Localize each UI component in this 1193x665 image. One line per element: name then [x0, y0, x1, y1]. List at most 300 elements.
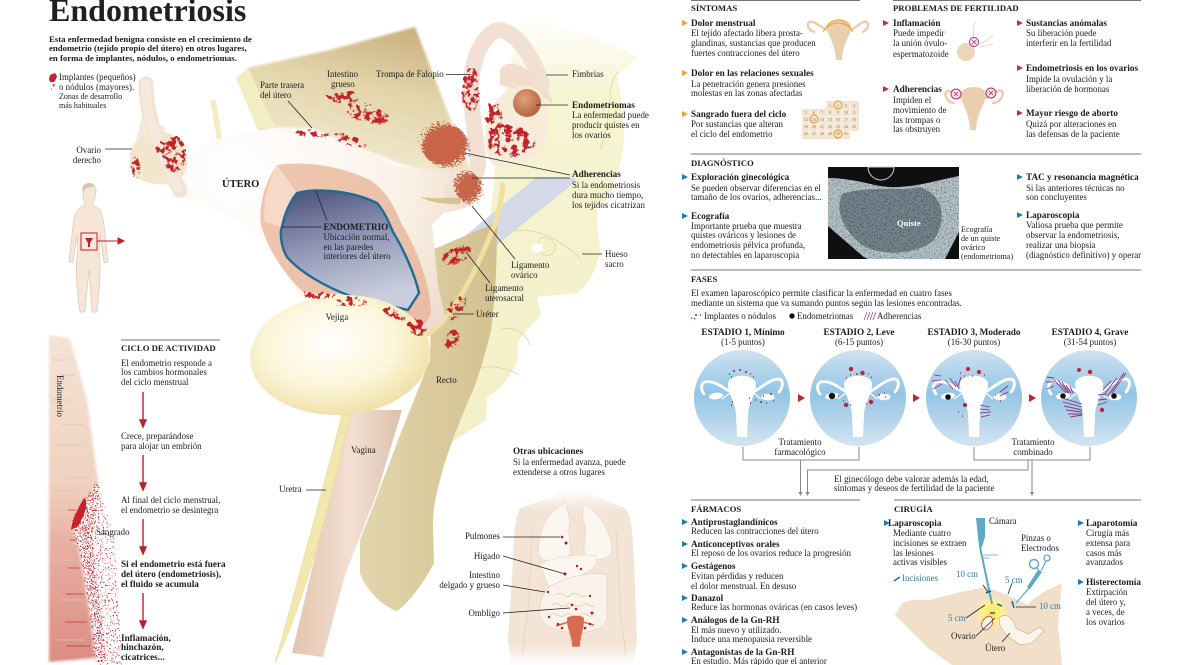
caption: Ecografía — [961, 225, 993, 234]
text step 5: cicatrices... — [121, 652, 165, 662]
item: adherencias — [883, 84, 947, 134]
stage 1: (1-5 puntos) — [721, 337, 765, 347]
item: laparoscopia — [884, 518, 967, 567]
legend: incisiones: Incisiones — [902, 573, 939, 583]
item: histerectomía: Extirpación — [1086, 587, 1128, 597]
label: pulmones — [465, 531, 560, 541]
right ovary — [485, 86, 548, 168]
label: adherencias: dura mucho tiempo, — [572, 190, 643, 200]
icon: calendar: 17 — [844, 117, 848, 122]
item: aborto: las defensas de la paciente — [1026, 129, 1120, 139]
intestines — [540, 574, 607, 633]
label: intestino grueso: grueso — [331, 79, 355, 89]
label: tratamiento farmacológico — [774, 437, 826, 457]
item: sangrado: Por sustancias que alteran — [691, 119, 783, 129]
description: El examen laparoscópico permite clasificar la enfermedad en cuatro fases — [691, 288, 952, 298]
item: tac: TAC y resonancia magnética — [1026, 172, 1139, 182]
implants — [547, 536, 594, 629]
item: histerectomía: a veces, de — [1086, 607, 1125, 617]
icon: calendar: 3 — [845, 103, 847, 108]
item: Análogos de la Gn-RH — [691, 615, 780, 625]
label: trompa: Trompa de Falopio — [376, 69, 444, 79]
label: útero: ÚTERO — [222, 178, 259, 190]
stage 3: ESTADIO 3, Moderado — [928, 327, 1021, 337]
left fimbria — [135, 100, 178, 170]
intro text: en forma de implantes, nódulos, o endometriomas. — [49, 53, 237, 63]
item: endometriosis ovarios: liberación de hormonas — [1026, 84, 1110, 94]
rectum — [360, 222, 497, 611]
label: endometriomas: Endometriomas — [572, 100, 635, 110]
peritoneum pale band — [210, 68, 275, 152]
text step 1: los cambios hormonales — [121, 367, 207, 377]
item: inflamación: Inflamación — [893, 18, 940, 28]
arrow — [140, 593, 146, 628]
torso — [508, 490, 637, 665]
item: dolor menstrual — [682, 18, 816, 58]
intro text — [49, 34, 252, 63]
item: inflamación: Puede impedir — [893, 28, 945, 38]
label: adherencias: Si la endometriosis — [572, 180, 641, 190]
intro text: endometrio (tejido propio del útero) en otros lugares, — [49, 43, 247, 53]
legend: Implantes o nódulos — [704, 311, 777, 321]
label: uretra: Uretra — [279, 484, 302, 494]
text step 3: Al final del ciclo menstrual, — [121, 495, 220, 505]
label: ligamento ovárico: ovárico — [511, 270, 538, 280]
caption: (endometrioma) — [961, 252, 1013, 261]
item: ecografía: endometriosis pélvica profunda, — [691, 240, 805, 250]
item: laparotomía: Laparotomía — [1086, 518, 1138, 528]
left tube — [146, 84, 180, 190]
item — [682, 517, 819, 536]
text step 4: del útero (endometriosis), — [121, 569, 221, 579]
endometrium strip — [49, 335, 122, 665]
item: Antagonistas de la Gn-RH — [691, 647, 794, 657]
label: recto: Recto — [436, 375, 457, 385]
icon: calendar: 31 — [844, 131, 848, 136]
item: laparoscopia: Valiosa prueba que permite — [1026, 220, 1123, 230]
label: ligamento ovárico: Ligamento — [511, 260, 550, 270]
item: adherencias: las obstruyen — [893, 124, 941, 134]
item: exploración — [682, 172, 822, 202]
uterus — [556, 616, 594, 646]
item: laparoscopia: incisiones se extraen — [893, 538, 967, 548]
legend: implants — [49, 72, 136, 110]
label: cámara: Cámara — [989, 516, 1017, 526]
divider heading — [121, 339, 220, 341]
left ovary — [130, 132, 187, 184]
item: ecografía: Ecografía — [691, 211, 730, 221]
uterine cavity — [281, 190, 419, 310]
item — [682, 539, 852, 558]
text step 4 — [121, 559, 226, 589]
icon: calendar: 25 — [852, 124, 856, 129]
label: parte trasera — [260, 80, 312, 128]
item: Danazol — [691, 593, 724, 603]
icon: calendar: 13 — [812, 117, 816, 122]
label: ovario: Ovario — [951, 631, 976, 641]
label: endometrio: ENDOMETRIO — [324, 222, 388, 232]
uterus cross-section wall — [260, 163, 431, 335]
legend — [691, 311, 922, 321]
icon: calendar: 9 — [837, 110, 839, 115]
intro text: Esta enfermedad benigna consiste en el crecimiento de — [49, 34, 252, 44]
arrow — [140, 392, 146, 427]
panel: cirugía — [884, 500, 1141, 665]
item: El más nuevo y utilizado. — [691, 625, 781, 635]
icon: calendar: 23 — [836, 124, 840, 129]
heading — [513, 446, 626, 477]
label: fimbrias: Fimbrias — [572, 69, 604, 79]
endometrioma cyst — [513, 89, 541, 117]
measure: 10 cm: 10 cm — [1039, 601, 1061, 611]
label: hueso sacro: Hueso — [605, 249, 628, 259]
text step 2: para alojar un embrión — [121, 441, 202, 451]
icon: calendar: 11 — [852, 110, 856, 115]
label: pinzas — [1021, 533, 1059, 553]
item: dolor menstrual: Dolor menstrual — [691, 18, 756, 28]
description: mediante un sistema que va sumando puntos según las lesiones encontradas. — [691, 298, 962, 308]
incision marks — [986, 591, 1014, 613]
item — [682, 593, 857, 612]
label: tratamiento combinado: Tratamiento — [1011, 437, 1055, 447]
label: uréter — [453, 309, 499, 319]
item: dolor relaciones: La penetración genera presiones — [691, 79, 806, 89]
description — [691, 288, 962, 308]
item: laparoscopia — [1017, 210, 1141, 260]
treatment brackets and arrows — [743, 447, 1090, 496]
label: endometriomas: La enfermedad puede — [572, 110, 649, 120]
label: ligamento uterosacral: Ligamento — [485, 283, 524, 293]
item: sangrado: Sangrado fuera del ciclo — [691, 109, 787, 119]
panel: síntomas — [682, 0, 868, 139]
icon: calendar: 22 — [828, 124, 832, 129]
item: el dolor menstrual. En desuso — [691, 581, 797, 591]
measure: 5 cm: 5 cm — [948, 613, 966, 623]
heading: PROBLEMAS DE FERTILIDAD — [893, 3, 1019, 13]
item: aborto — [1017, 108, 1120, 139]
item: laparotomía — [1078, 518, 1138, 567]
illustration: pelvic anatomy — [130, 15, 649, 663]
icon: calendar — [802, 101, 859, 139]
label: endometrio — [282, 191, 391, 261]
item: sangrado: el ciclo del endometrio — [691, 129, 773, 139]
icon: calendar: 6 — [813, 110, 815, 115]
item: ecografía: Importante prueba que muestra — [691, 221, 802, 231]
item: sustancias: interferir en la fertilidad — [1026, 38, 1112, 48]
icon: calendar: 16 — [836, 117, 840, 122]
icon: calendar: 15 — [828, 117, 832, 122]
small figure with location marker — [69, 183, 124, 312]
item: dolor menstrual: fuertes contracciones del útero — [691, 48, 800, 58]
arrow — [140, 455, 146, 490]
arrow — [913, 394, 920, 402]
item: inflamación: la unión óvulo- — [893, 38, 947, 48]
legend: implants: más habituales — [59, 101, 106, 110]
icon: calendar: 18 — [852, 117, 856, 122]
label: fimbrias — [546, 69, 604, 79]
legend: implants: Implantes (pequeños) — [59, 72, 136, 82]
label: pulmones: Pulmones — [465, 531, 501, 541]
icon: calendar: 29 — [828, 131, 832, 136]
item: laparotomía: extensa para — [1086, 538, 1130, 548]
label: hueso sacro: sacro — [605, 259, 624, 269]
large intestine background — [247, 27, 472, 172]
item: laparoscopia: las lesiones — [893, 548, 934, 558]
arrow — [798, 394, 805, 402]
text step 5: Inflamación, — [121, 633, 171, 643]
item: endometriosis ovarios — [1017, 63, 1138, 94]
item: laparoscopia: Laparoscopia — [888, 518, 942, 528]
item: exploración: tamaño de los ovarios, adherencias... — [691, 192, 822, 202]
label: ligamento uterosacral — [466, 252, 524, 303]
text step 2: Crece, preparándose — [121, 431, 193, 441]
item: exploración: Exploración ginecológica — [691, 172, 790, 182]
icon: calendar: 24 — [844, 124, 848, 129]
bladder — [247, 290, 433, 420]
uterus body — [170, 130, 482, 336]
label: intestino: Intestino — [469, 570, 501, 580]
label: adherencias: Adherencias — [572, 169, 621, 179]
label: ombligo: Ombligo — [468, 608, 501, 618]
note: El ginecólogo debe valorar además la edad, — [834, 474, 989, 484]
item: tac: Si las anteriores técnicas no — [1026, 183, 1125, 193]
legend: Adherencias — [877, 311, 922, 321]
stage 2: ESTADIO 2, Leve — [823, 327, 895, 337]
label: endometriomas: producir quistes en — [572, 120, 640, 130]
item: aborto: Quizá por alteraciones en — [1026, 119, 1117, 129]
item: laparotomía: Cirugía más — [1086, 528, 1130, 538]
icon: calendar: 12 — [804, 117, 808, 122]
label: tratamiento farmacológico: Tratamiento — [778, 437, 822, 447]
legend: implants: o nódulos (mayores). — [59, 82, 134, 92]
adhesions — [422, 124, 481, 202]
forceps — [1016, 555, 1050, 603]
item: inflamación: espermatozoide — [893, 49, 949, 59]
icon: calendar: 26 — [804, 131, 808, 136]
item: dolor menstrual: El tejido afectado libera prosta- — [691, 28, 803, 38]
heading: FÁRMACOS — [691, 504, 741, 514]
item: adherencias: Impiden el — [893, 95, 932, 105]
item: ecografía — [682, 211, 805, 260]
item: Induce una menopausia reversible — [691, 634, 812, 644]
panel: problemas de fertilidad — [883, 0, 1141, 139]
vagina — [292, 410, 402, 657]
item: laparoscopia: Mediante cuatro — [893, 528, 951, 538]
text step 1: El endometrio responde a — [121, 358, 212, 368]
item: Reducen las contracciones del útero — [691, 526, 819, 536]
uterosacral ligament — [438, 177, 575, 285]
text step 3 — [121, 495, 220, 515]
item: tac: son concluyentes — [1026, 192, 1087, 202]
label: intestino grueso: Intestino — [327, 69, 359, 79]
item: sustancias — [1017, 18, 1112, 48]
right fimbria — [500, 64, 553, 104]
item: Anticonceptivos orales — [691, 539, 780, 549]
icon: calendar: 10 — [844, 110, 848, 115]
label: uréter: Uréter — [476, 309, 499, 319]
small ovary — [982, 616, 993, 630]
stage 2 — [810, 327, 906, 446]
label: intestino grueso — [327, 69, 359, 89]
small uterus — [999, 615, 1044, 645]
legend: Endometriomas — [797, 311, 854, 321]
icon: calendar: 21 — [820, 124, 824, 129]
panel: ciclo de actividad — [49, 335, 226, 665]
item: sustancias: Sustancias anómalas — [1026, 18, 1107, 28]
item: dolor relaciones — [682, 68, 814, 98]
abdomen — [895, 583, 1062, 665]
label: ovario derecho — [73, 145, 132, 165]
label: vagina: Vagina — [351, 445, 376, 455]
arrow — [140, 519, 146, 554]
endometriosis implants — [131, 68, 536, 352]
caption — [961, 225, 1013, 261]
icon: calendar: 4 — [853, 103, 855, 108]
item: Gestágenos — [691, 561, 736, 571]
item: histerectomía: los ovarios — [1086, 617, 1125, 627]
icon: calendar: 2 — [837, 103, 839, 108]
label: vejiga: Vejiga — [326, 312, 348, 322]
item: Reduce las hormonas ováricas (en casos leves) — [691, 602, 857, 612]
label: endometrio: en las paredes — [324, 242, 374, 252]
stage 4 — [1041, 327, 1137, 446]
label: endometrio: Ubicación normal, — [324, 232, 390, 242]
item: sustancias: Su liberación puede — [1026, 28, 1097, 38]
item: histerectomía: del útero y, — [1086, 597, 1126, 607]
stage 3: (16-30 puntos) — [948, 337, 1000, 347]
label: quiste: Quiste — [897, 218, 921, 228]
label: parte trasera: Parte trasera — [260, 80, 304, 90]
heading: FASES — [691, 274, 718, 284]
label: endometrio vertical: Endometrio — [55, 375, 65, 417]
stage 2: (6-15 puntos) — [835, 337, 883, 347]
icon: calendar: 28 — [820, 131, 824, 136]
item: Evitan pérdidas y reducen — [691, 571, 784, 581]
item: laparoscopia: Laparoscopia — [1026, 210, 1080, 220]
panel: fases — [691, 270, 1141, 496]
label: endometriomas — [536, 100, 649, 140]
text step 2 — [121, 431, 202, 451]
icon: calendar: 19 — [804, 124, 808, 129]
label: hueso sacro — [582, 249, 628, 269]
icon: calendar: 27 — [812, 131, 816, 136]
label: ligamento uterosacral: uterosacral — [485, 293, 524, 303]
broad ligament gap — [421, 193, 462, 204]
label: intestino: delgado y grueso — [439, 580, 501, 590]
item: sangrado — [682, 109, 787, 139]
label: parte trasera: del útero — [260, 90, 292, 100]
icon: uterus pain — [808, 19, 868, 60]
text step 4: Si el endometrio está fuera — [121, 559, 226, 569]
item: adherencias: movimiento de — [893, 105, 947, 115]
stage 3 — [926, 327, 1022, 446]
panel: otras ubicaciones — [439, 446, 637, 665]
item: exploración: Se pueden observar diferencias en el — [691, 183, 821, 193]
item: Antiprostaglandínicos — [691, 517, 778, 527]
label: endometriomas: los ovarios — [572, 130, 611, 140]
right tube — [452, 30, 542, 190]
text step 5 — [121, 633, 171, 662]
label: pinzas: Electrodos — [1021, 543, 1059, 553]
sacrum bone — [450, 15, 637, 442]
label: ligamento ovárico — [472, 206, 550, 280]
item: dolor menstrual: glandinas, sustancias que producen — [691, 38, 816, 48]
text step 3: el endometrio se desintegra — [121, 505, 218, 515]
icon: blocked tubes — [945, 87, 1003, 130]
icon: calendar: 7 — [821, 110, 823, 115]
item: El reposo de los ovarios reduce la progresión — [691, 548, 852, 558]
label: uretra — [279, 484, 326, 494]
label: endometrio: interiores del útero — [324, 251, 391, 261]
item: laparotomía: casos más — [1086, 548, 1122, 558]
heading: SÍNTOMAS — [691, 3, 737, 13]
label: ovario derecho: derecho — [73, 155, 102, 165]
text step 1: del ciclo menstrual — [121, 377, 189, 387]
stage 4: ESTADIO 4, Grave — [1052, 327, 1128, 337]
item: endometriosis ovarios: Impide la ovulación y la — [1026, 74, 1112, 84]
lungs — [538, 503, 612, 562]
icon: calendar: 14 — [820, 117, 824, 122]
note — [834, 474, 994, 493]
surgery illustration — [895, 518, 1062, 665]
body contour lines — [522, 530, 626, 655]
item — [682, 561, 797, 591]
label: tratamiento combinado: combinado — [1013, 447, 1053, 457]
icon: calendar: 30 — [836, 131, 840, 136]
liver — [540, 555, 597, 587]
item — [682, 647, 827, 665]
label: sangrado: Sangrado — [96, 527, 130, 537]
item: dolor relaciones: Dolor en las relaciones sexuales — [691, 68, 814, 78]
panel: diagnóstico — [682, 154, 1141, 261]
note: síntomas y deseos de fertilidad de la paciente — [834, 483, 994, 493]
item: ecografía: no detectables en laparoscopia — [691, 250, 799, 260]
text step 5: hinchazón, — [121, 642, 164, 652]
item: laparoscopia: (diagnóstico definitivo) y operar — [1026, 250, 1141, 260]
camera — [976, 518, 998, 604]
icon: egg and sperm — [957, 22, 993, 61]
stage 1: ESTADIO 1, Mínimo — [701, 327, 785, 337]
label: tratamiento farmacológico: farmacológico — [774, 447, 826, 457]
label: pinzas: Pinzas o — [1021, 533, 1051, 543]
arrow — [1029, 394, 1036, 402]
heading: Otras ubicaciones — [513, 446, 584, 456]
label: ombligo — [468, 608, 570, 618]
ultrasound photo — [828, 167, 959, 259]
label: útero: Útero — [985, 643, 1006, 653]
heading: DIAGNÓSTICO — [691, 158, 754, 168]
text step 4: el fluido se acumula — [121, 579, 199, 589]
item: laparoscopia: activas visibles — [893, 557, 948, 567]
label: adherencias — [465, 153, 646, 210]
heading: extenderse a otros lugares — [513, 467, 605, 477]
label: ovario derecho: Ovario — [76, 145, 102, 155]
heading: Si la enfermedad avanza, puede — [513, 457, 626, 467]
icon: calendar: 8 — [829, 110, 831, 115]
stage 1 — [694, 327, 790, 446]
panel: fármacos — [682, 500, 860, 665]
icon: calendar: 20 — [812, 124, 816, 129]
item: laparotomía: avanzados — [1086, 557, 1124, 567]
icon: calendar: 1 — [829, 103, 831, 108]
item: histerectomía: Histerectomía — [1086, 577, 1141, 587]
measure: 10 cm: 10 cm — [956, 569, 978, 579]
label: tratamiento combinado — [1011, 437, 1055, 457]
leaders — [966, 583, 1036, 642]
text step 1 — [121, 358, 212, 387]
legend: implants: Zonas de desarrollo — [59, 92, 122, 101]
item: dolor relaciones: molestas en las zonas afectadas — [691, 88, 803, 98]
